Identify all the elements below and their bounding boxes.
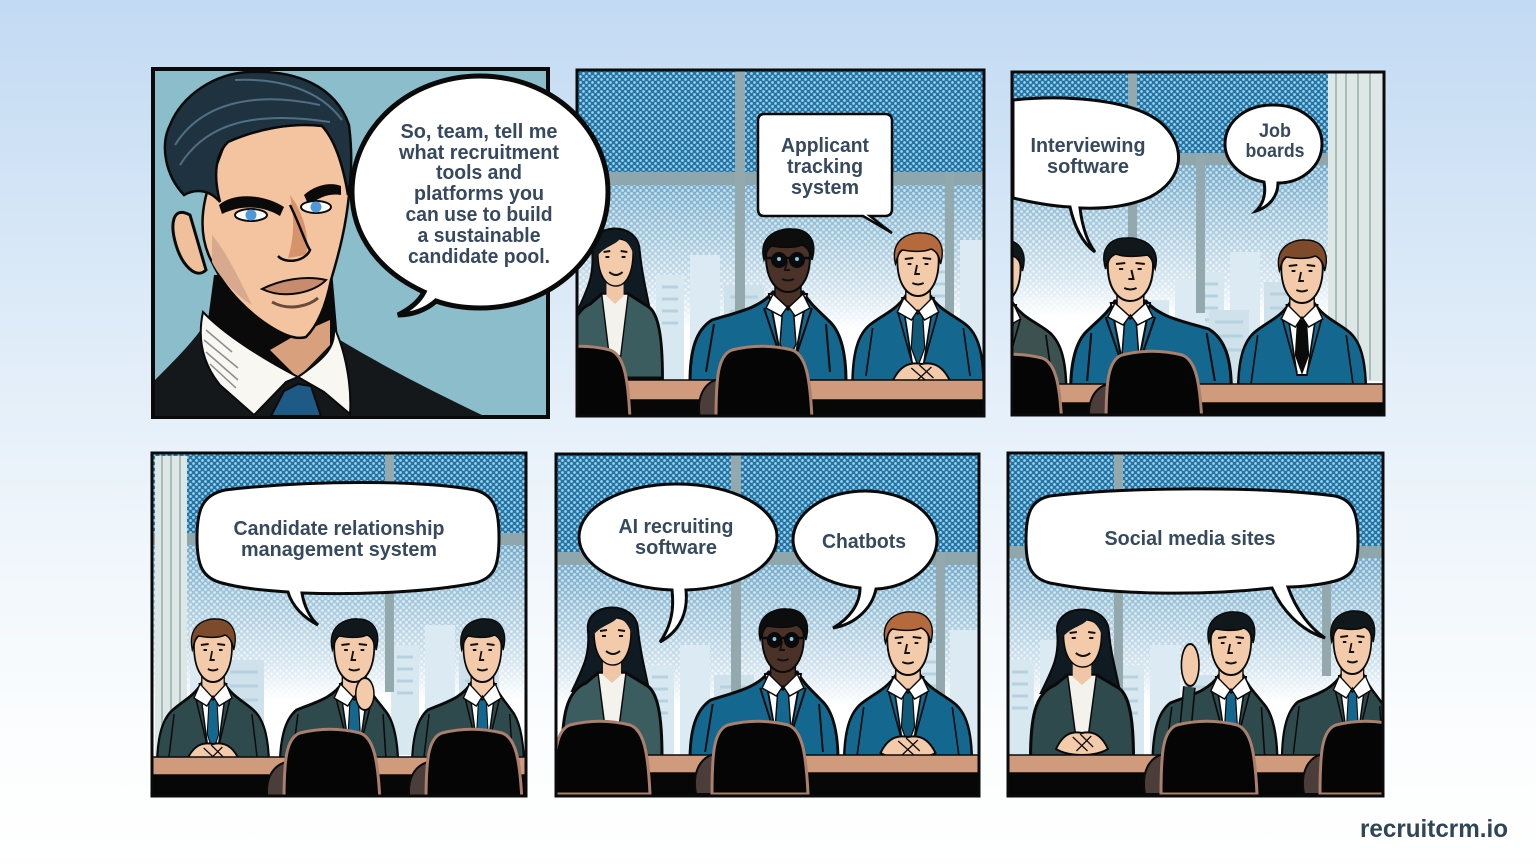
nose (278, 205, 310, 261)
panel border (1012, 72, 1384, 415)
speech bubble: applicant tracking system: tracking (787, 155, 863, 178)
speech bubble: manager's question: platforms you (414, 182, 544, 205)
chair (267, 729, 380, 802)
table (648, 754, 978, 773)
person: woman (568, 228, 662, 378)
speech bubble: manager's question: what recruitment (398, 141, 559, 164)
table (576, 380, 985, 400)
panel border (1008, 453, 1383, 796)
chair (409, 729, 522, 802)
curtain (1328, 71, 1385, 381)
person: woman (562, 607, 662, 757)
speech bubble: chatbots: Chatbots (822, 530, 906, 553)
panel border (556, 454, 979, 796)
table (1011, 384, 1385, 403)
speech bubble: job boards: Job (1259, 121, 1291, 142)
panel border (577, 70, 984, 416)
speech bubble: manager's question: can use to build (406, 203, 552, 226)
speech bubble: applicant tracking system: Applicant (781, 134, 869, 157)
speech bubble: AI recruiting software: AI recruiting (618, 515, 734, 538)
mouth (262, 278, 326, 294)
person: left man (157, 619, 269, 772)
person: red-haired man (844, 612, 972, 765)
chair (695, 721, 808, 794)
speech bubble: interviewing software (1013, 98, 1179, 252)
person: brown-haired man (1238, 240, 1366, 393)
person: man with sunglasses (690, 609, 838, 762)
speech bubble: manager's question: candidate pool. (408, 245, 550, 268)
person: man with sunglasses (690, 229, 846, 382)
person: middle man looking up (280, 619, 398, 772)
jacket (155, 322, 484, 416)
person: right man (1280, 610, 1382, 754)
chair (1014, 352, 1063, 414)
panel: interviewing software and job boards (1010, 70, 1386, 416)
speech bubble: candidate relationship management system: Candidate relationship (234, 517, 444, 540)
chair (578, 344, 632, 414)
panel: candidate relationship management system (151, 452, 527, 802)
ear (173, 212, 206, 273)
speech bubble: social media sites: Social media sites (1104, 527, 1276, 550)
hair (165, 72, 351, 202)
cheek shadows (212, 235, 252, 305)
speech bubble: manager's question: tools and (436, 161, 522, 184)
table (151, 757, 527, 775)
table (1010, 754, 1318, 773)
speech bubble: AI recruiting software: software (635, 536, 717, 559)
person: right man (412, 619, 524, 772)
speech bubble: job boards (1225, 105, 1322, 211)
speech bubble: manager's question: a sustainable (418, 224, 540, 247)
panel: applicant tracking system (576, 68, 986, 418)
panel: social media sites (1006, 452, 1416, 797)
speech bubble: social media sites (1026, 489, 1358, 638)
speech bubble: manager's question: So, team, tell me (400, 120, 558, 143)
face (202, 124, 349, 338)
curtain (155, 456, 187, 756)
speech bubble: candidate relationship management system: management system (241, 538, 437, 561)
speech bubble: interviewing software: software (1047, 155, 1129, 178)
portrait: manager (155, 72, 484, 416)
chair (699, 346, 812, 419)
speech bubble: manager's question (352, 76, 608, 315)
chair (558, 720, 652, 794)
brand wordmark: recruitcrm.io (1360, 815, 1508, 843)
person: man gesturing (1153, 612, 1277, 765)
speech bubble: AI recruiting software (579, 484, 777, 642)
speech bubble: job boards: boards (1246, 141, 1304, 162)
shirt collar (201, 312, 350, 415)
chair (1144, 721, 1257, 794)
speech bubble: interviewing software: Interviewing (1030, 134, 1146, 157)
speech bubble: applicant tracking system (758, 114, 892, 233)
panel: AI recruiting software and chatbots (554, 452, 980, 798)
chair (1089, 350, 1203, 414)
person: partial man at left (1014, 241, 1068, 384)
panel: manager asking the question (153, 69, 608, 417)
person: red-haired man (852, 233, 984, 386)
tie (271, 384, 321, 416)
speech bubble: candidate relationship management system (197, 482, 499, 625)
chair (1303, 720, 1382, 794)
speech bubble: applicant tracking system: system (791, 176, 859, 199)
person: dark-haired man (1071, 238, 1231, 391)
panel border (152, 453, 526, 796)
panel background (153, 69, 548, 417)
speech bubble: chatbots (793, 491, 937, 628)
person: laughing woman (1030, 609, 1134, 759)
brows and eyes (219, 184, 341, 216)
neck (208, 270, 338, 378)
